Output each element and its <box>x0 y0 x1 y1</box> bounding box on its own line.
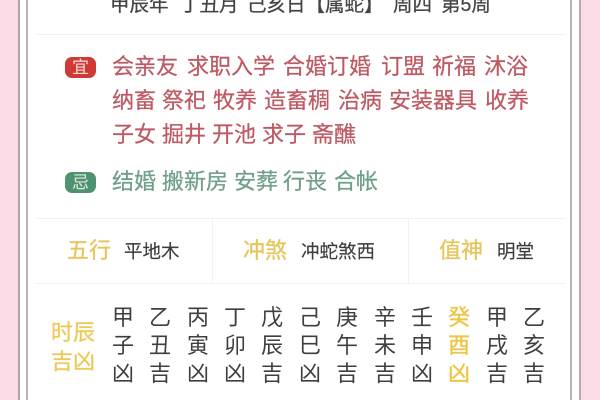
five elements cell: 平地木 <box>124 241 180 262</box>
duty god cell: 明堂 <box>497 241 534 262</box>
auspicious activities: 求子 <box>262 122 306 147</box>
auspicious activities: 收养 <box>485 88 529 113</box>
clash cell <box>243 238 375 263</box>
hour fortune table: 凶 <box>224 361 246 386</box>
auspicious activities: 沐浴 <box>484 54 528 79</box>
hour fortune table: 亥 <box>523 333 545 358</box>
auspicious activities: 订盟 <box>381 54 425 79</box>
hour fortune table: 吉 <box>486 361 508 386</box>
auspicious activities: 纳畜 <box>112 88 156 113</box>
auspicious activities: 开池 <box>212 122 256 147</box>
five elements cell: 五行 <box>67 238 111 263</box>
hour fortune table: 凶 <box>411 361 433 386</box>
hour fortune label: 时辰 <box>51 320 95 345</box>
hour fortune table: 酉 <box>448 333 470 358</box>
hour fortune table: 丁 <box>224 305 246 330</box>
hour fortune table: 吉 <box>149 361 171 386</box>
hour fortune table: 凶 <box>448 361 470 386</box>
duty god cell <box>439 238 534 263</box>
hour fortune table: 戌 <box>486 333 508 358</box>
hour fortune table: 己 <box>299 305 321 330</box>
hour fortune table: 未 <box>374 333 396 358</box>
hour fortune table: 卯 <box>224 333 246 358</box>
hour fortune table: 乙 <box>523 305 545 330</box>
hour fortune table: 甲 <box>486 305 508 330</box>
auspicious activities: 祭祀 <box>162 88 206 113</box>
hour fortune table: 甲 <box>112 305 134 330</box>
hour fortune table: 辰 <box>261 333 283 358</box>
hour fortune table: 寅 <box>187 333 209 358</box>
hour fortune table: 吉 <box>523 361 545 386</box>
auspicious activities: 子女 <box>112 122 156 147</box>
hour fortune table: 凶 <box>299 361 321 386</box>
hour fortune table: 巳 <box>299 333 321 358</box>
hour fortune table: 庚 <box>336 305 358 330</box>
hour fortune table: 吉 <box>374 361 396 386</box>
inauspicious activities: 搬新房 <box>162 169 228 194</box>
hour fortune table: 午 <box>336 333 358 358</box>
auspicious activities <box>112 54 529 147</box>
clash cell: 冲蛇煞西 <box>301 241 375 262</box>
auspicious activities: 会亲友 <box>112 54 178 79</box>
hour fortune table: 壬 <box>411 305 433 330</box>
hour fortune table: 丙 <box>187 305 209 330</box>
hour fortune label: 吉凶 <box>51 349 95 374</box>
hour fortune table: 乙 <box>149 305 171 330</box>
hour fortune table: 凶 <box>112 361 134 386</box>
inauspicious activities: 安葬 <box>234 169 278 194</box>
hour fortune table: 戊 <box>261 305 283 330</box>
badge: 宜: 宜 <box>72 58 89 77</box>
clash cell: 冲煞 <box>243 238 287 263</box>
hour fortune table: 癸 <box>448 305 470 330</box>
hour fortune table: 子 <box>112 333 134 358</box>
badge: 忌 <box>65 172 96 193</box>
inauspicious activities: 合帐 <box>334 169 378 194</box>
hour fortune table <box>112 305 545 386</box>
hour fortune table: 吉 <box>261 361 283 386</box>
auspicious activities: 牧养 <box>213 88 257 113</box>
inauspicious activities: 行丧 <box>283 169 327 194</box>
hour fortune table: 丑 <box>149 333 171 358</box>
badge: 宜 <box>65 57 96 78</box>
auspicious activities: 掘井 <box>162 122 206 147</box>
auspicious activities: 治病 <box>338 88 382 113</box>
auspicious activities: 求职入学 <box>187 54 275 79</box>
auspicious activities: 造畜稠 <box>264 88 330 113</box>
auspicious activities: 祈福 <box>432 54 476 79</box>
hour fortune table: 凶 <box>187 361 209 386</box>
date header line <box>110 0 491 16</box>
five elements cell <box>67 238 180 263</box>
badge: 忌: 忌 <box>72 173 89 192</box>
auspicious activities: 斋醮 <box>312 122 356 147</box>
hour fortune table: 申 <box>411 333 433 358</box>
inauspicious activities <box>112 169 378 194</box>
inauspicious activities: 结婚 <box>112 169 156 194</box>
hour fortune table: 吉 <box>336 361 358 386</box>
auspicious activities: 安装器具 <box>389 88 477 113</box>
auspicious activities: 合婚订婚 <box>283 54 371 79</box>
hour fortune label <box>51 320 95 374</box>
duty god cell: 值神 <box>439 238 483 263</box>
hour fortune table: 辛 <box>374 305 396 330</box>
